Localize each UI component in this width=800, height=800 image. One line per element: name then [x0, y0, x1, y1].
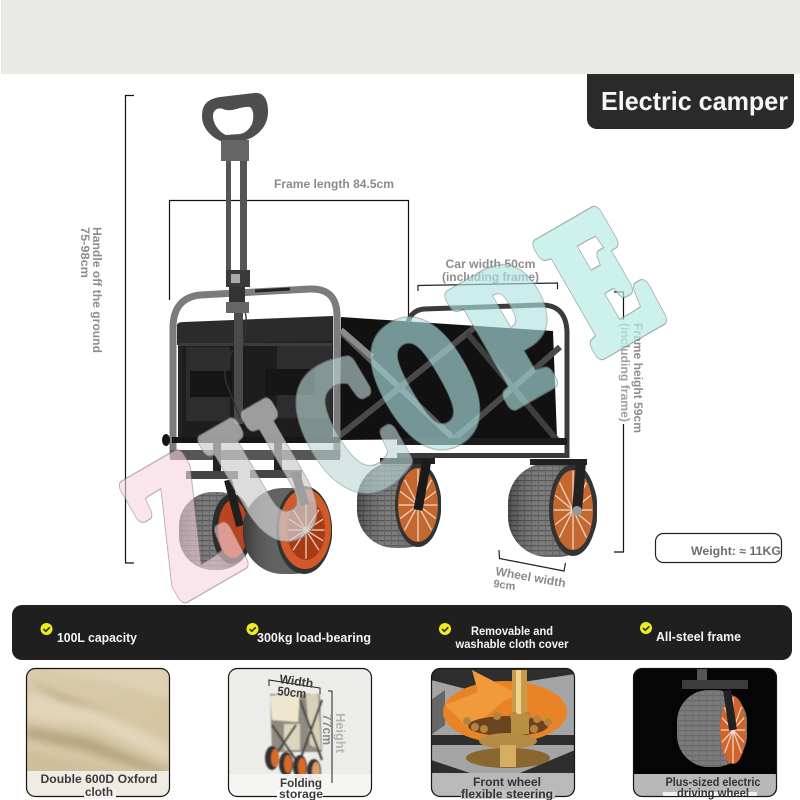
watermark letters: [95, 171, 687, 633]
watermark letters: Z: [95, 414, 269, 633]
dimension: wheel width: Wheel width: [494, 564, 567, 590]
dimension: car width: [418, 259, 558, 291]
tile: plus-sized wheel: [633, 668, 777, 800]
dimension: frame height: [614, 292, 645, 552]
side scissor frame: [333, 327, 560, 441]
tile: folding storage: Folding: [280, 776, 322, 790]
watermark letters: U: [180, 366, 351, 584]
watermark letters: U: [180, 366, 351, 584]
tile: plus-sized wheel: driving wheel: [677, 788, 749, 800]
front chassis: [170, 437, 340, 479]
title tab: Electric camper: [587, 74, 794, 129]
telescopic pole: [234, 312, 243, 424]
handle: [202, 93, 268, 313]
feature: 100L capacity: [40, 623, 137, 645]
front fabric panel: [178, 317, 333, 438]
front-right wheel: [243, 472, 332, 574]
cable: [225, 298, 246, 418]
tile: front wheel steering: [431, 668, 575, 800]
ball bearings: [463, 712, 552, 734]
feature: removable cover: washable cloth cover: [455, 639, 569, 651]
watermark letters: E: [516, 171, 687, 388]
feature bar: [12, 605, 792, 660]
side tube: [341, 330, 372, 357]
rear-right wheel: [508, 459, 597, 557]
rear chassis rail: [397, 438, 569, 458]
rear frame arch: [408, 305, 567, 458]
tile: folding storage: Width: [279, 672, 314, 691]
dimension: frame length: Frame length 84.5cm: [274, 177, 394, 191]
feature: 300kg load-bearing: [246, 623, 371, 645]
feature: all-steel frame: All-steel frame: [656, 630, 741, 644]
folded cart: [265, 692, 322, 783]
tile: oxford cloth: Double 600D Oxford: [40, 772, 158, 786]
weight box: [656, 534, 782, 562]
feature: all-steel frame: [640, 622, 741, 644]
tile: oxford cloth: [26, 668, 170, 799]
dimension: car width: (including frame): [442, 272, 539, 284]
pockets: [186, 346, 332, 421]
watermark letters: C: [258, 316, 437, 538]
dimension: wheel width: 9cm: [493, 578, 516, 593]
feature: removable cover: Removable and: [471, 626, 553, 638]
dimension: frame length: [170, 177, 408, 320]
watermark letters: O: [335, 272, 515, 493]
weight box: Weight: ≈ 11KG: [691, 546, 781, 558]
front frame arch: [173, 289, 337, 458]
feature: removable cover: [439, 623, 569, 651]
dimension: frame height: Frame height 59cm: [631, 323, 645, 433]
top roll: [177, 316, 333, 345]
knob: [162, 434, 170, 446]
dimension: handle height: Handle off the ground: [90, 227, 104, 353]
watermark letters: P: [428, 222, 599, 439]
front-left wheel: [179, 480, 252, 570]
tile: plus-sized wheel: Plus-sized electric: [666, 777, 761, 789]
tile: folding storage: Height: [333, 713, 347, 754]
watermark letters: Z: [95, 414, 269, 633]
feature: 300kg load-bearing: 300kg load-bearing: [257, 631, 371, 645]
orange swivel ring: [443, 670, 567, 743]
dimension: wheel width: [493, 550, 567, 593]
tile: folding storage: [228, 668, 372, 800]
side fabric panel: [340, 317, 557, 440]
tile: folding storage: 77cm: [320, 714, 334, 745]
watermark letters: O: [335, 272, 515, 493]
tile: front wheel steering: Front wheel: [473, 775, 541, 789]
watermark letters: C: [258, 316, 437, 538]
dimension: car width: Car width 50cm: [446, 259, 536, 271]
tile: folding storage: 50cm: [277, 684, 307, 701]
dimension: handle height: 75-98cm: [78, 227, 92, 278]
top banner band: [1, 0, 800, 74]
title tab: Electric camper: Electric camper: [601, 86, 788, 116]
watermark letters: P: [428, 222, 599, 439]
watermark letters: E: [516, 171, 687, 388]
feature: 100L capacity: 100L capacity: [57, 631, 137, 645]
rear-left wheel: [357, 458, 441, 548]
dimension: handle height: [78, 96, 134, 563]
tile: oxford cloth: cloth: [85, 785, 113, 799]
wagon illustration: [162, 93, 597, 574]
dimension: frame height: (including frame): [618, 323, 632, 422]
